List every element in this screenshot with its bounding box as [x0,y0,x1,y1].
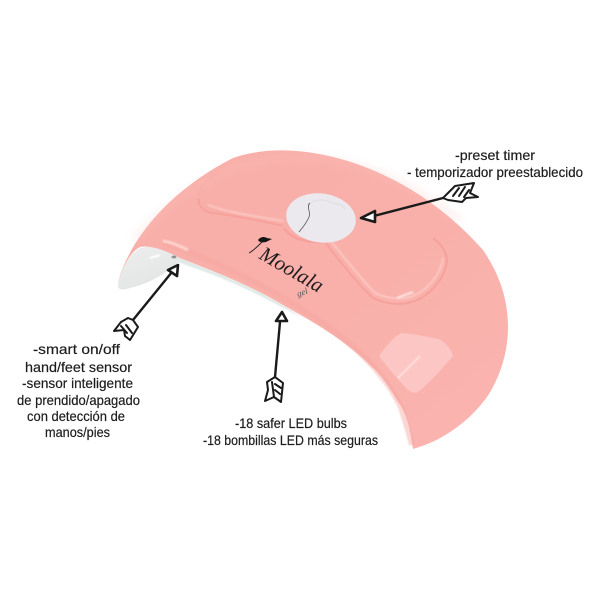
inner gloss [150,255,160,258]
label: preset timer: - temporizador preestablecido [407,164,583,180]
arrow fletching [265,377,283,402]
label: smart on/off sensor: hand/feet sensor [25,359,132,375]
arrow fletching [114,318,138,340]
logo hat mark [258,237,272,242]
label: smart on/off sensor: -sensor inteligente [22,375,133,391]
sticker pad: glossy sensor window [379,333,453,393]
label: preset timer: -preset timer [455,147,535,163]
label: LED bulbs: -18 bombillas LED más seguras [203,432,378,448]
lamp underside: white inner shell [118,247,183,289]
arrow: hand/feet sensor [114,265,178,340]
ridge: ring around dial [284,228,325,242]
arrow: LED bulbs [265,312,287,402]
logo gel: gel [295,286,309,299]
ridge: raised bow-shaped panel right wing [325,238,447,304]
arrow head [276,312,287,321]
dial: white timer button [283,189,359,247]
arrow shaft [133,272,172,320]
label: smart on/off sensor: de prendido/apagado [17,392,140,408]
label: LED bulbs: -18 safer LED bulbs [235,415,347,431]
arrow shaft [370,198,443,217]
label: preset timer [407,147,583,180]
arrow fletching [443,183,478,202]
ridge: raised bow-shaped panel left wing [199,172,283,226]
label: smart on/off sensor: -smart on/off [33,341,120,357]
arrow shaft [275,322,280,377]
highlight: left edge gloss [163,241,188,250]
arrow head [361,211,375,222]
arrow: preset timer [361,183,478,222]
logo wordmark: Moolala [255,241,328,297]
lamp shell: darker lower edge shading [163,243,412,445]
sensor dot [172,256,176,258]
label: smart on/off sensor: con detección de [27,408,125,424]
lamp underside: pale lower rim [178,258,303,318]
label: LED bulbs [203,415,378,448]
label: smart on/off sensor [17,341,140,440]
logo: Moolala gel script [249,237,328,299]
sticker pad gloss [398,356,420,378]
lamp: pink UV LED lamp [118,150,508,449]
lamp shell: soft top highlight [135,157,460,240]
label: smart on/off sensor: manos/pies [45,424,110,440]
dial: hairline crack detail [299,203,310,232]
arrow head [168,265,178,276]
lamp shell: pink top [118,150,508,449]
